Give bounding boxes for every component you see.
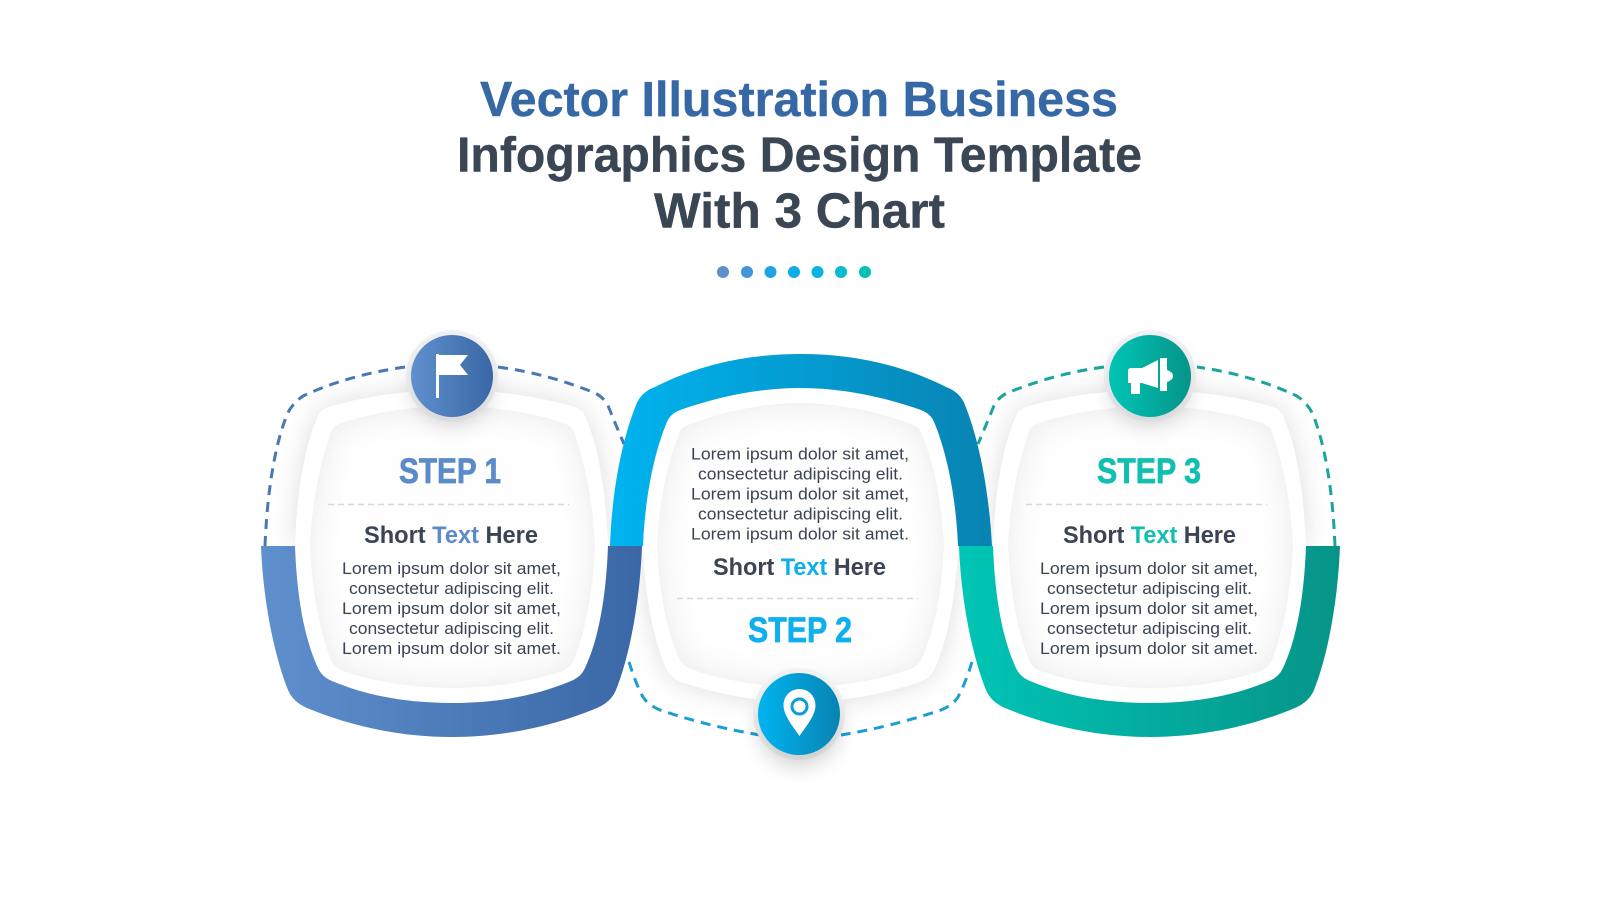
step 3 heading: STEP 3 — [1097, 452, 1201, 491]
step 1 body text: Lorem ipsum dolor sit amet, — [342, 599, 561, 618]
step 3 colored band — [959, 546, 1340, 737]
step 2 body text: Lorem ipsum dolor sit amet, — [691, 444, 909, 464]
step 1 shadow — [295, 390, 608, 546]
step 2 short text: Short Text Here — [713, 554, 886, 581]
step 2 white plate — [643, 388, 958, 702]
step 2 heading: STEP 2 — [748, 611, 852, 650]
step 1 badge shadow — [410, 344, 494, 428]
step 3 body text: Lorem ipsum dolor sit amet, — [1040, 559, 1258, 578]
step 3 dashed outline — [978, 367, 1335, 546]
step 3 badge — [1109, 335, 1191, 417]
title: With 3 Chart — [654, 184, 945, 238]
step 2 dashed outline — [629, 662, 972, 735]
title — [457, 73, 1142, 238]
title: Vector Illustration Business — [480, 73, 1118, 127]
step 3 body text: consectetur adipiscing elit. — [1047, 579, 1252, 598]
step 1 badge halo — [406, 330, 498, 422]
icon: flag — [436, 354, 468, 398]
step 2 body text: Lorem ipsum dolor sit amet. — [691, 524, 909, 544]
step 1 colored band — [261, 546, 642, 737]
step 2 body text: consectetur adipiscing elit. — [698, 464, 903, 484]
step 1 body text: consectetur adipiscing elit. — [349, 579, 554, 598]
step 2 shadow — [643, 546, 958, 702]
step 1 body text: Lorem ipsum dolor sit amet. — [342, 639, 561, 658]
step 2 badge shadow — [757, 684, 841, 768]
step 3 badge shadow — [1108, 344, 1192, 428]
step 1 body text: consectetur adipiscing elit. — [349, 619, 554, 638]
title: Infographics Design Template — [457, 128, 1142, 182]
step 3 body text: Lorem ipsum dolor sit amet, — [1040, 599, 1258, 618]
decorative dot row — [717, 266, 871, 278]
step 2 badge halo — [753, 668, 845, 760]
step 3 shadow — [993, 390, 1306, 546]
step 2 colored band — [610, 354, 992, 546]
panel: step 3 — [959, 330, 1340, 737]
panel: step 1 — [261, 330, 642, 737]
step 3 short text: Short Text Here — [1063, 522, 1236, 549]
step 1 dashed outline — [265, 367, 624, 546]
step 3 body text — [1040, 559, 1258, 658]
step 1 body text — [342, 559, 561, 658]
icon: megaphone — [1128, 358, 1173, 394]
step 3 inner panel — [1008, 406, 1293, 688]
panel backdrop: step 2 — [629, 388, 972, 735]
step 1 short text: Short Text Here — [364, 522, 538, 549]
step 3 body text: Lorem ipsum dolor sit amet. — [1040, 639, 1258, 658]
step 1 badge — [411, 335, 493, 417]
step 2 body text: consectetur adipiscing elit. — [698, 504, 903, 524]
step 1 white plate — [295, 390, 608, 703]
step 1 heading: STEP 1 — [399, 452, 501, 491]
step 1 inner panel — [310, 406, 595, 688]
step 2 badge — [758, 673, 840, 755]
step 3 white plate — [993, 390, 1306, 703]
step 3 body text: consectetur adipiscing elit. — [1047, 619, 1252, 638]
step 2 inner panel — [657, 403, 944, 687]
panel: step 2 — [610, 354, 992, 768]
icon: map pin — [784, 689, 816, 736]
step 2 body text — [691, 444, 909, 544]
step 3 badge halo — [1104, 330, 1196, 422]
step 1 body text: Lorem ipsum dolor sit amet, — [342, 559, 561, 578]
step 2 body text: Lorem ipsum dolor sit amet, — [691, 484, 909, 504]
